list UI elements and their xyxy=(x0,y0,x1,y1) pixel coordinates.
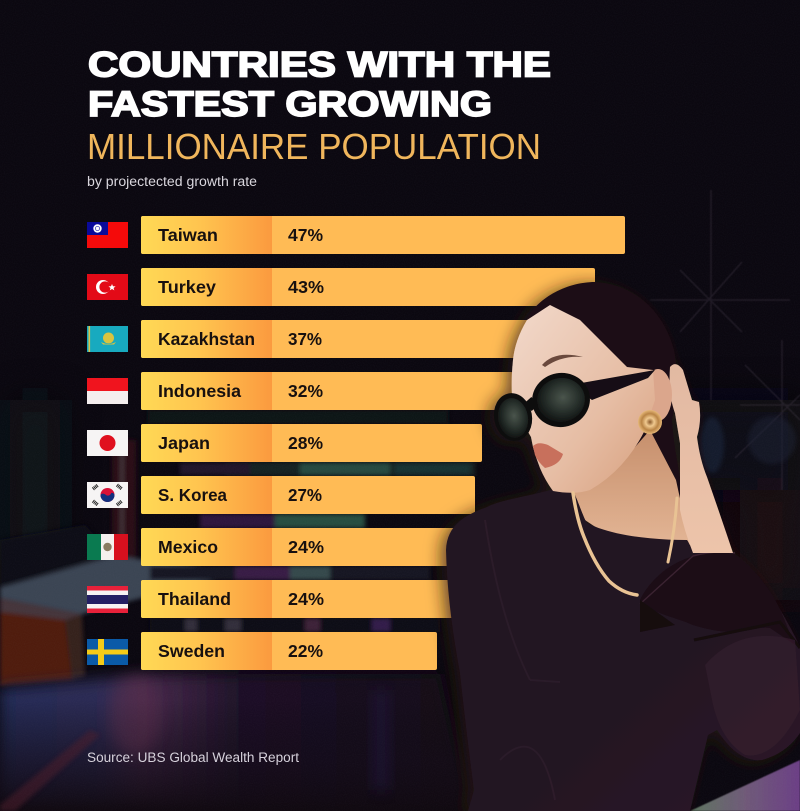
title line 3: MILLIONAIRE POPULATION xyxy=(87,126,541,167)
value: 37%: 37% xyxy=(288,329,322,349)
necklace xyxy=(573,493,677,595)
icon: flag of Thailand xyxy=(87,586,128,613)
bar: Indonesia 32% xyxy=(141,372,526,410)
row: Thailand xyxy=(87,580,461,618)
value: 32%: 32% xyxy=(288,381,323,401)
ear xyxy=(644,369,672,421)
label: Turkey: Turkey xyxy=(158,277,216,297)
dress xyxy=(446,490,800,811)
value: 28%: 28% xyxy=(288,433,323,453)
sleeve cuff xyxy=(640,552,795,645)
bar: Thailand 24% xyxy=(141,580,461,618)
value: 24%: 24% xyxy=(288,537,324,557)
subtitle: by projectected growth rate xyxy=(87,174,257,189)
label: Taiwan: Taiwan xyxy=(158,225,218,245)
bar: Mexico 24% xyxy=(141,528,461,566)
eyebrow xyxy=(542,355,583,367)
row: Kazakhstan xyxy=(87,320,540,358)
label: Kazakhstan: Kazakhstan xyxy=(158,329,255,349)
label: Sweden: Sweden xyxy=(158,641,225,661)
row: Taiwan xyxy=(87,216,625,254)
title line 1: COUNTRIES WITH THE xyxy=(88,46,551,84)
icon: flag of Kazakhstan xyxy=(87,326,128,352)
sunglasses xyxy=(490,368,655,444)
lips xyxy=(533,443,563,468)
value: 22%: 22% xyxy=(288,641,323,661)
icon: flag of South Korea xyxy=(87,482,128,508)
hand xyxy=(670,364,733,553)
value: 43%: 43% xyxy=(288,277,324,297)
row: Mexico xyxy=(87,528,461,566)
hair back xyxy=(527,282,682,495)
title xyxy=(87,46,551,167)
row: Turkey xyxy=(87,268,595,306)
value: 47%: 47% xyxy=(288,225,323,245)
icon: flag of Japan xyxy=(87,430,128,456)
row: Sweden xyxy=(87,632,437,670)
label: Thailand: Thailand xyxy=(158,589,231,609)
icon: flag of Turkey xyxy=(87,274,128,300)
icon: flag of Sweden xyxy=(87,639,128,665)
icon: flag of Taiwan xyxy=(87,222,128,248)
label: Japan: Japan xyxy=(158,433,210,453)
bar: Kazakhstan 37% xyxy=(141,320,540,358)
bar: Turkey 43% xyxy=(141,268,595,306)
row: Japan xyxy=(87,424,482,462)
bar: Sweden 22% xyxy=(141,632,437,670)
label: Mexico: Mexico xyxy=(158,537,218,557)
label: Indonesia: Indonesia xyxy=(158,381,241,401)
bar: S. Korea 27% xyxy=(141,476,475,514)
woman in sunglasses xyxy=(446,282,800,811)
bar: Japan 28% xyxy=(141,424,482,462)
neck and chest xyxy=(573,430,690,545)
icon: flag of Mexico xyxy=(87,534,128,560)
earring xyxy=(638,410,662,434)
bar: Taiwan 47% xyxy=(141,216,625,254)
label: S. Korea: S. Korea xyxy=(158,485,227,505)
source note: Source: UBS Global Wealth Report xyxy=(87,750,299,765)
row: Indonesia xyxy=(87,372,526,410)
face xyxy=(512,305,655,493)
icon: flag of Indonesia xyxy=(87,378,128,404)
decorative sparkles xyxy=(650,190,800,490)
value: 24%: 24% xyxy=(288,589,324,609)
bar chart xyxy=(87,216,625,670)
value: 27%: 27% xyxy=(288,485,322,505)
title line 2: FASTEST GROWING xyxy=(88,85,492,124)
row: S. Korea xyxy=(87,476,475,514)
dress folds xyxy=(485,520,560,800)
